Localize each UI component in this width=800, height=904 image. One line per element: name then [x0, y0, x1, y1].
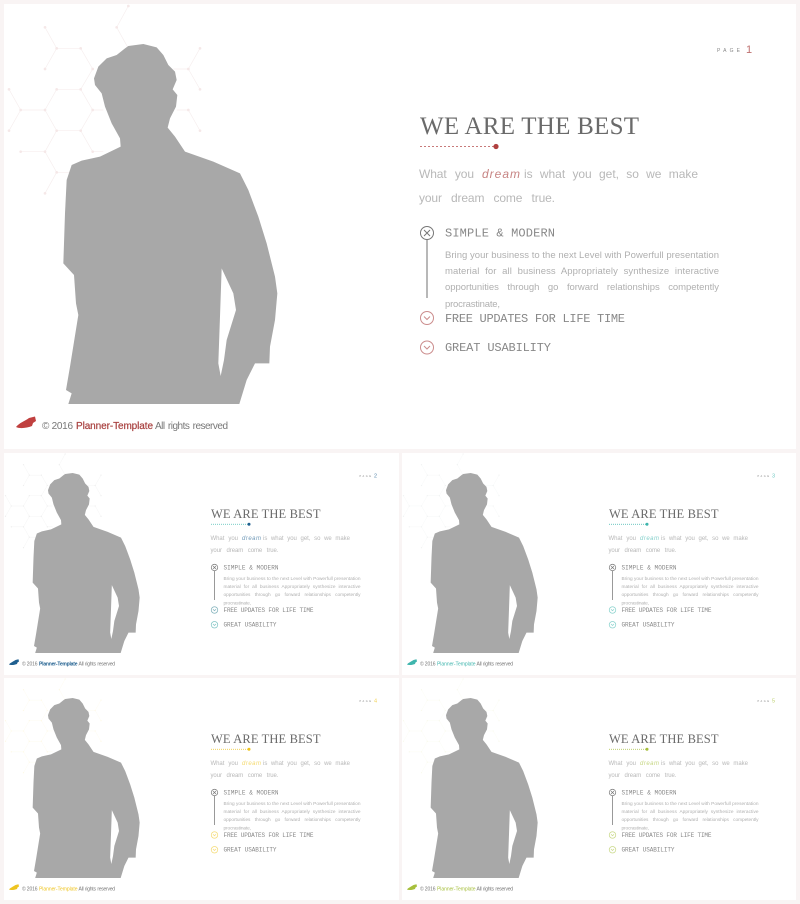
page number	[717, 44, 752, 56]
page number: PAGE	[717, 48, 741, 54]
tagline	[608, 761, 749, 779]
footer: All rights reserved	[155, 421, 228, 432]
icon: chevron	[211, 622, 218, 628]
feature description	[445, 250, 719, 310]
feature description: opportunities through go forward relationships competently	[224, 592, 361, 598]
tagline: is what you get, so we make	[524, 167, 698, 181]
silhouette of man	[63, 44, 277, 404]
footer: © 2016	[420, 886, 436, 892]
feature description	[622, 576, 759, 606]
panel: slide 3	[402, 453, 796, 675]
hexagon pattern	[403, 454, 499, 548]
page number: PAGE	[758, 475, 769, 478]
tagline	[210, 761, 351, 779]
page number: 4	[374, 698, 377, 704]
tagline	[608, 536, 749, 554]
tagline: is what you get, so we make	[263, 536, 351, 542]
panel: slide 1	[4, 4, 796, 449]
page number: 3	[772, 474, 775, 480]
tagline: your dream come true.	[210, 548, 279, 554]
feature description: Bring your business to the next Level with Powerfull presentation	[622, 576, 759, 582]
feature description: opportunities through go forward relationships competently	[445, 282, 719, 293]
page number: PAGE	[758, 700, 769, 703]
tagline: dream	[242, 536, 261, 542]
page number: 2	[374, 474, 377, 480]
footer: All rights reserved	[476, 662, 513, 668]
tagline: your dream come true.	[419, 191, 555, 205]
icon: chevron	[609, 832, 616, 838]
heading underline	[609, 523, 648, 526]
icon: open item	[420, 226, 434, 298]
feature description	[224, 576, 361, 606]
icon: chevron	[211, 846, 218, 853]
footer: Planner-Template	[437, 886, 476, 892]
feature heading: great usability: GREAT USABILITY	[224, 846, 277, 854]
icon: chevron	[609, 607, 616, 613]
tagline: What you	[608, 761, 636, 767]
icon: open item	[211, 789, 218, 825]
feature description: procrastinate,	[224, 826, 251, 832]
tagline: What you	[419, 167, 474, 181]
footer: © 2016	[22, 660, 38, 668]
feature heading: free updates: FREE UPDATES FOR LIFE TIME	[622, 607, 712, 614]
page number: 1	[746, 44, 752, 56]
hexagon pattern	[5, 679, 101, 773]
icon: shoe logo	[9, 659, 19, 665]
footer	[22, 886, 115, 892]
footer: All rights reserved	[78, 662, 115, 668]
icon: open item	[211, 564, 218, 600]
tagline: your dream come true.	[608, 773, 677, 779]
footer: Planner-Template	[39, 662, 78, 668]
footer: © 2016	[42, 421, 73, 432]
heading: WE ARE THE BEST	[609, 732, 719, 746]
heading: WE ARE THE BEST	[609, 507, 719, 521]
feature heading: great usability: GREAT USABILITY	[224, 622, 277, 628]
tagline: dream	[482, 167, 520, 181]
icon: shoe logo	[407, 659, 417, 665]
heading underline	[420, 144, 499, 149]
footer: © 2016	[420, 660, 436, 668]
feature heading: free updates: FREE UPDATES FOR LIFE TIME	[224, 832, 314, 839]
hexagon pattern	[9, 6, 200, 193]
feature heading: simple and modern: SIMPLE & MODERN	[622, 564, 677, 571]
footer	[420, 660, 513, 668]
feature description: procrastinate,	[445, 299, 500, 310]
feature description: material for all business Appropriately synthesize interactive	[224, 809, 361, 815]
feature heading: great usability: GREAT USABILITY	[445, 341, 551, 355]
footer: Planner-Template	[437, 662, 476, 668]
footer	[420, 886, 513, 892]
silhouette of man	[431, 473, 538, 653]
tagline: What you	[608, 536, 636, 542]
silhouette of man	[33, 698, 140, 878]
feature heading: great usability: GREAT USABILITY	[622, 622, 675, 628]
feature heading: simple and modern: SIMPLE & MODERN	[224, 564, 279, 571]
feature heading: simple and modern: SIMPLE & MODERN	[224, 789, 279, 796]
silhouette of man	[33, 473, 140, 653]
icon: shoe logo	[16, 416, 36, 428]
feature description: procrastinate,	[224, 600, 251, 606]
page number: PAGE	[360, 475, 371, 478]
icon: shoe logo	[9, 884, 19, 890]
icon: open item	[609, 564, 616, 600]
heading underline	[211, 523, 250, 526]
feature description: Bring your business to the next Level with Powerfull presentation	[224, 576, 361, 582]
page number: 5	[772, 698, 775, 704]
icon: open item	[609, 789, 616, 825]
panel: slide 4	[4, 678, 399, 900]
page number	[360, 474, 377, 480]
feature description: material for all business Appropriately synthesize interactive	[224, 584, 361, 590]
tagline: What you	[210, 761, 238, 767]
heading underline	[609, 748, 648, 751]
tagline: is what you get, so we make	[661, 761, 749, 767]
silhouette of man	[431, 698, 538, 878]
heading: WE ARE THE BEST	[211, 732, 321, 746]
tagline: dream	[640, 536, 659, 542]
feature description: opportunities through go forward relationships competently	[622, 592, 759, 598]
icon: shoe logo	[407, 884, 417, 890]
feature description: procrastinate,	[622, 600, 649, 606]
footer: Planner-Template	[39, 886, 78, 892]
tagline: What you	[210, 536, 238, 542]
panel: slide 5	[402, 678, 796, 900]
feature description: opportunities through go forward relationships competently	[622, 817, 759, 823]
feature description: material for all business Appropriately synthesize interactive	[622, 584, 759, 590]
tagline: is what you get, so we make	[661, 536, 749, 542]
tagline: dream	[640, 761, 659, 767]
hexagon pattern	[403, 679, 499, 773]
feature heading: free updates: FREE UPDATES FOR LIFE TIME	[622, 832, 712, 839]
tagline: your dream come true.	[210, 773, 279, 779]
feature heading: free updates: FREE UPDATES FOR LIFE TIME	[224, 607, 314, 614]
icon: chevron	[211, 832, 218, 838]
feature heading: simple and modern: SIMPLE & MODERN	[445, 226, 555, 240]
tagline: is what you get, so we make	[263, 761, 351, 767]
feature description	[622, 801, 759, 832]
panel: slide 2	[4, 453, 399, 675]
heading: WE ARE THE BEST	[420, 113, 639, 140]
heading: WE ARE THE BEST	[211, 507, 321, 521]
icon: chevron	[420, 312, 434, 324]
icon: chevron	[609, 846, 616, 853]
page number	[360, 698, 377, 704]
tagline: dream	[242, 761, 261, 767]
feature description: Bring your business to the next Level with Powerfull presentation	[622, 801, 759, 807]
footer: Planner-Template	[76, 421, 153, 432]
footer: All rights reserved	[78, 886, 115, 892]
feature description: material for all business Appropriately synthesize interactive	[445, 266, 719, 277]
feature description	[224, 801, 361, 832]
feature heading: free updates: FREE UPDATES FOR LIFE TIME	[445, 312, 625, 326]
icon: chevron	[420, 341, 434, 354]
hexagon pattern	[5, 454, 101, 548]
heading underline	[211, 748, 250, 751]
tagline	[210, 536, 351, 554]
feature description: procrastinate,	[622, 826, 649, 832]
tagline: your dream come true.	[608, 548, 677, 554]
feature heading: simple and modern: SIMPLE & MODERN	[622, 789, 677, 796]
feature heading: great usability: GREAT USABILITY	[622, 846, 675, 854]
page number	[758, 474, 775, 480]
footer: © 2016	[22, 886, 38, 892]
feature description: material for all business Appropriately synthesize interactive	[622, 809, 759, 815]
icon: chevron	[609, 622, 616, 628]
feature description: Bring your business to the next Level with Powerfull presentation	[445, 250, 719, 261]
footer: All rights reserved	[476, 886, 513, 892]
footer	[42, 421, 228, 432]
icon: chevron	[211, 607, 218, 613]
page number: PAGE	[360, 700, 371, 703]
footer	[22, 660, 115, 668]
tagline	[419, 167, 698, 205]
feature description: Bring your business to the next Level with Powerfull presentation	[224, 801, 361, 807]
page number	[758, 698, 775, 704]
feature description: opportunities through go forward relationships competently	[224, 817, 361, 823]
